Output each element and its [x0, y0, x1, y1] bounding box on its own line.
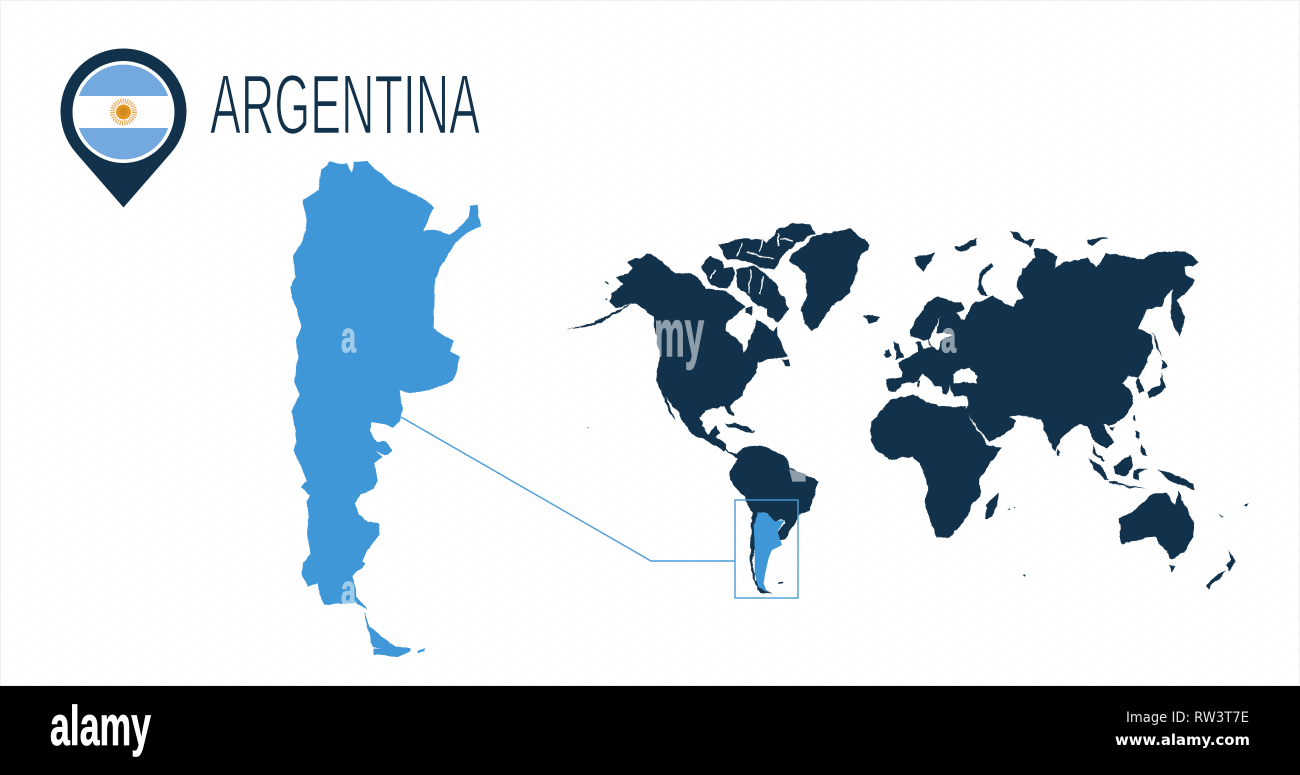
New Siberian Islands	[1087, 237, 1108, 246]
Sri Lanka	[1057, 449, 1061, 457]
North America, Greenland and Arctic	[568, 223, 879, 452]
image id: Image ID: RW3T7E	[1126, 710, 1249, 726]
Madagascar	[985, 493, 998, 518]
Alaskan islands	[587, 281, 608, 429]
Greenland	[791, 228, 870, 332]
Argentina highlight on world map	[754, 513, 784, 592]
watermark letters on Argentina	[341, 313, 356, 615]
Black Sea	[953, 368, 977, 383]
Sumatra	[1087, 458, 1109, 480]
Borneo	[1115, 455, 1133, 476]
Franz Josef Land	[955, 238, 977, 250]
Australia	[1119, 492, 1195, 558]
mainland North America	[568, 254, 787, 452]
connector line	[401, 417, 735, 561]
Baffin and central Arctic islands	[737, 266, 789, 323]
Novaya Zemlya	[977, 263, 993, 295]
world map	[568, 223, 1250, 593]
flag bottom stripe	[79, 128, 168, 159]
Central and South America	[718, 423, 819, 593]
Pacific islands	[1008, 503, 1250, 577]
watermark patch over Brazil	[789, 469, 806, 482]
Cuba	[725, 423, 753, 432]
flag ring	[72, 61, 174, 163]
Svalbard	[914, 253, 935, 272]
Queen Elizabeth Islands and Ellesmere	[718, 223, 816, 269]
Africa, Southeast Asia and Oceania	[870, 395, 1250, 589]
Hokkaido	[1160, 361, 1168, 369]
New Zealand south	[1206, 569, 1225, 589]
Great Britain	[893, 341, 905, 360]
watermark letters on world map: a	[941, 313, 956, 362]
Java and Lesser Sunda	[1108, 482, 1147, 488]
Baltic Sea	[929, 317, 952, 349]
Arctic channels	[710, 233, 793, 295]
Victoria Island	[702, 256, 735, 288]
Iceland	[864, 314, 879, 323]
Sakhalin	[1152, 332, 1162, 357]
title: ARGENTINA	[210, 58, 480, 152]
Newfoundland	[782, 358, 791, 367]
watermark letters on world map	[654, 296, 956, 370]
Hispaniola	[745, 430, 755, 432]
New Zealand north	[1227, 550, 1236, 572]
flag sun	[112, 101, 134, 123]
mainland	[290, 162, 481, 609]
Philippines south	[1140, 443, 1147, 456]
New Guinea	[1158, 470, 1194, 489]
locator box	[735, 500, 798, 598]
website: www.alamy.com	[1115, 731, 1250, 749]
Staten Island	[418, 648, 426, 652]
alamy logo: alamy	[50, 694, 151, 757]
watermark letters on world map: my	[654, 296, 704, 370]
South America	[718, 442, 819, 593]
Malay Peninsula	[1093, 445, 1105, 463]
mainland Eurasia	[887, 247, 1198, 452]
Tasmania	[1170, 565, 1176, 573]
footer bar	[0, 686, 1300, 775]
Sulawesi	[1133, 468, 1147, 480]
Ireland	[884, 350, 892, 358]
Falkland Islands	[779, 581, 784, 583]
map pin with flag	[61, 48, 186, 208]
pin body	[61, 48, 186, 208]
Tierra del Fuego	[364, 613, 409, 657]
Sicily and Sardinia	[917, 380, 919, 387]
Eurasia	[884, 231, 1198, 452]
Luzon	[1135, 431, 1138, 439]
Great Lakes	[760, 358, 777, 367]
Africa	[870, 395, 1002, 537]
Taiwan	[1133, 416, 1136, 422]
watermark letters on Argentina: a	[341, 313, 356, 362]
Southampton Island	[745, 307, 753, 315]
Korea	[1135, 377, 1145, 393]
Honshu	[1147, 373, 1166, 399]
Hainan	[1111, 427, 1115, 431]
Severnaya Zemlya	[1011, 231, 1035, 246]
flag top stripe	[79, 65, 168, 96]
large map of Argentina	[290, 162, 481, 657]
White Sea	[957, 309, 970, 320]
watermark letters on Argentina: a	[341, 566, 356, 615]
